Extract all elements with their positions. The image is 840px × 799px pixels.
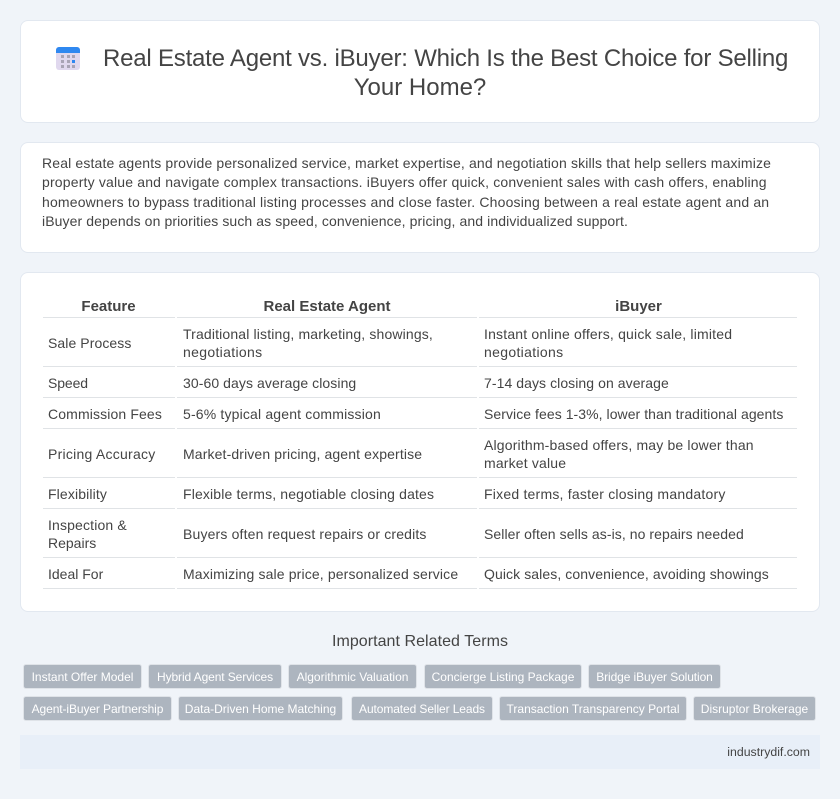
panel: introduction — [20, 142, 820, 253]
comparison table: Maximizing sale price, personalized service — [183, 566, 458, 582]
related term tags: Transaction Transparency Portal — [507, 702, 679, 716]
related term tags: Instant Offer Model — [32, 670, 133, 684]
comparison table: Buyers often request repairs or credits — [183, 526, 427, 542]
comparison table: Feature — [81, 298, 136, 315]
title — [103, 45, 788, 101]
comparison table: Ideal For — [48, 566, 103, 582]
comparison table: Quick sales, convenience, avoiding showings — [484, 566, 769, 582]
comparison table: Speed — [48, 375, 88, 391]
related term tags: Data-Driven Home Matching — [185, 702, 336, 716]
comparison table: Flexibility — [48, 486, 107, 502]
comparison table: 5-6% typical agent commission — [183, 406, 381, 422]
panel: comparison table — [20, 272, 820, 612]
heading: related terms: Important Related Terms — [332, 633, 508, 650]
text: introduction paragraph: Real estate agents provide personalized service, market expertise, and negotiation skills that help sellers maximize — [42, 155, 771, 171]
comparison table: Repairs — [48, 535, 96, 551]
related term tags: Algorithmic Valuation — [297, 670, 408, 684]
related term tags: Bridge iBuyer Solution — [596, 670, 713, 684]
text: introduction paragraph — [42, 155, 771, 229]
text: introduction paragraph: iBuyer depends on priorities such as speed, convenience, pricing, and individualized support. — [42, 213, 628, 229]
text: introduction paragraph: property value and navigate complex transactions. iBuyers offer quick, convenient sales with cash offers, enabling — [42, 174, 767, 190]
comparison table: Flexible terms, negotiable closing dates — [183, 486, 434, 502]
title: Real Estate Agent vs. iBuyer: Which Is the Best Choice for Selling — [103, 45, 788, 72]
comparison table: Commission Fees — [48, 406, 162, 422]
header panel — [20, 20, 820, 123]
comparison table: 7-14 days closing on average — [484, 375, 669, 391]
comparison table: Sale Process — [48, 335, 131, 351]
comparison table: iBuyer — [615, 298, 662, 315]
icon: calendar — [56, 47, 80, 70]
related term tags: Disruptor Brokerage — [701, 702, 808, 716]
related term tags — [23, 664, 816, 721]
comparison table: Seller often sells as-is, no repairs needed — [484, 526, 744, 542]
footer source text: industrydif.com — [727, 745, 810, 759]
footer bar — [20, 735, 820, 769]
comparison table: market value — [484, 455, 566, 471]
comparison table: negotiations — [484, 344, 563, 360]
related term tags: Agent-iBuyer Partnership — [32, 702, 163, 716]
related term tags: Hybrid Agent Services — [157, 670, 273, 684]
comparison table — [43, 298, 797, 589]
comparison table: Inspection & — [48, 517, 127, 533]
related term tags: Automated Seller Leads — [359, 702, 485, 716]
comparison table: Real Estate Agent — [264, 298, 390, 315]
related term tags: Concierge Listing Package — [432, 670, 574, 684]
comparison table: Instant online offers, quick sale, limited — [484, 326, 732, 342]
comparison table: Service fees 1-3%, lower than traditional agents — [484, 406, 783, 422]
comparison table: Fixed terms, faster closing mandatory — [484, 486, 726, 502]
comparison table: negotiations — [183, 344, 262, 360]
comparison table: 30-60 days average closing — [183, 375, 356, 391]
title: Your Home? — [354, 74, 486, 101]
comparison table: Pricing Accuracy — [48, 446, 155, 462]
comparison table: Algorithm-based offers, may be lower than — [484, 437, 754, 453]
comparison table: Market-driven pricing, agent expertise — [183, 446, 422, 462]
text: introduction paragraph: homeowners to bypass traditional listing processes and close faster. Choosing between a real estate agent and an — [42, 194, 769, 210]
comparison table: Traditional listing, marketing, showings, — [183, 326, 433, 342]
